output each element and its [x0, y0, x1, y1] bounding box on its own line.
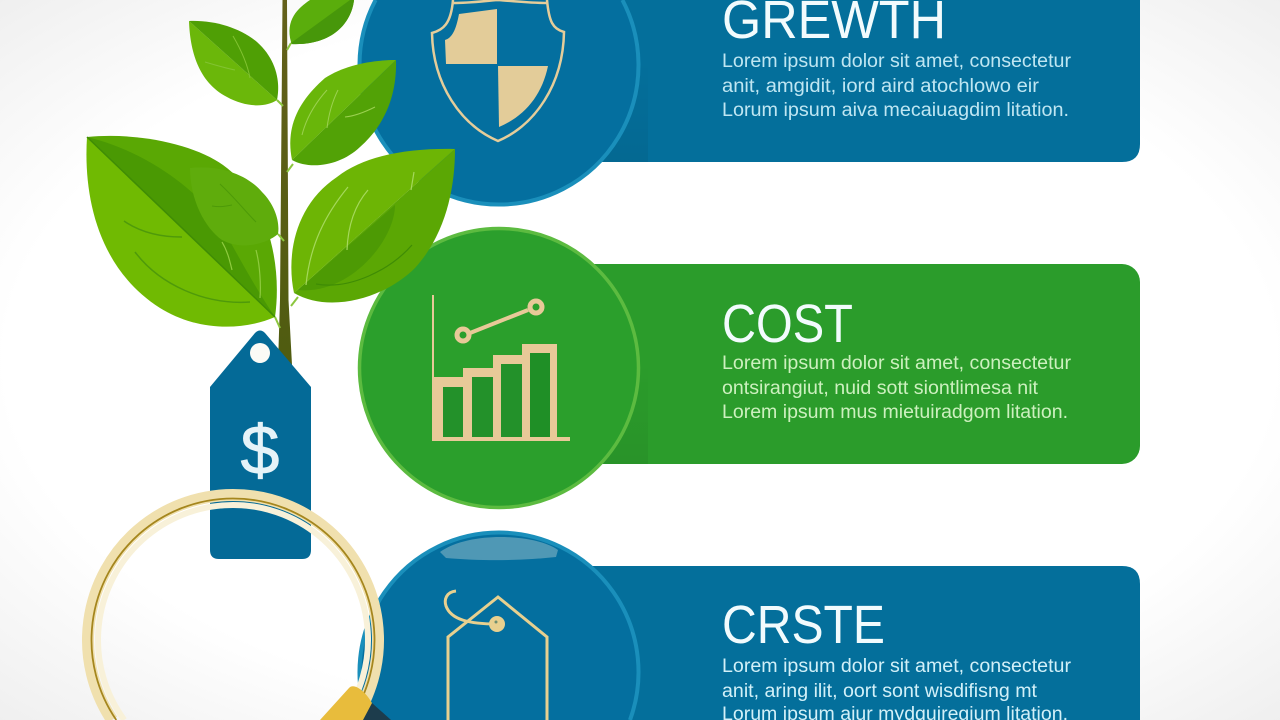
panel: cost — [560, 264, 1140, 464]
dollar sign: $ — [241, 411, 279, 489]
panel: crste — [560, 566, 1140, 720]
plant leaves — [86, 0, 455, 328]
text block: growth: Lorum ipsum aiva mecaiuagdim litation. — [722, 100, 1069, 121]
text block: growth: anit, amgidit, iord aird atochlowo eir — [722, 76, 1040, 97]
leaf: overlapping middle left — [190, 167, 284, 245]
leaf: middle right — [287, 60, 396, 172]
panel: growth — [560, 0, 1140, 162]
text block and heading: crste — [722, 595, 1072, 720]
leaf: large right — [291, 149, 455, 306]
highlight on circle — [440, 537, 558, 560]
circle: crste with tag icon — [360, 533, 638, 720]
text block and heading: crste: Lorem ipsum dolor sit amet, consectetur — [722, 656, 1072, 677]
text block: growth — [722, 51, 1072, 121]
leaf: top right — [287, 0, 354, 50]
text block and heading: crste: CRSTE — [722, 595, 885, 655]
circle: growth with shield icon — [360, 0, 638, 205]
icon: bar chart — [432, 295, 570, 441]
text block: cost: ontsirangiut, nuid sott siontlimesa nit — [722, 378, 1039, 399]
circle: cost with chart icon — [360, 228, 638, 508]
magnifying glass — [88, 495, 391, 720]
text block: cost — [722, 353, 1072, 423]
text block: growth: Lorem ipsum dolor sit amet, consectetur — [722, 51, 1072, 72]
icon: outline price tag — [445, 591, 547, 720]
icon: shield — [432, 0, 564, 141]
text block: cost: Lorem ipsum dolor sit amet, consectetur — [722, 353, 1072, 374]
heading: cost: COST — [722, 294, 853, 354]
text block and heading: crste: anit, aring ilit, oort sont wisdifisng mt — [722, 681, 1038, 702]
leaf: large left — [86, 136, 280, 328]
leaf: top left — [189, 21, 283, 106]
magnifier handle — [320, 686, 391, 720]
text block: cost: Lorem ipsum mus mietuiradgom litation. — [722, 402, 1068, 423]
plant stem — [278, 0, 292, 365]
price tag with dollar sign — [210, 330, 311, 559]
